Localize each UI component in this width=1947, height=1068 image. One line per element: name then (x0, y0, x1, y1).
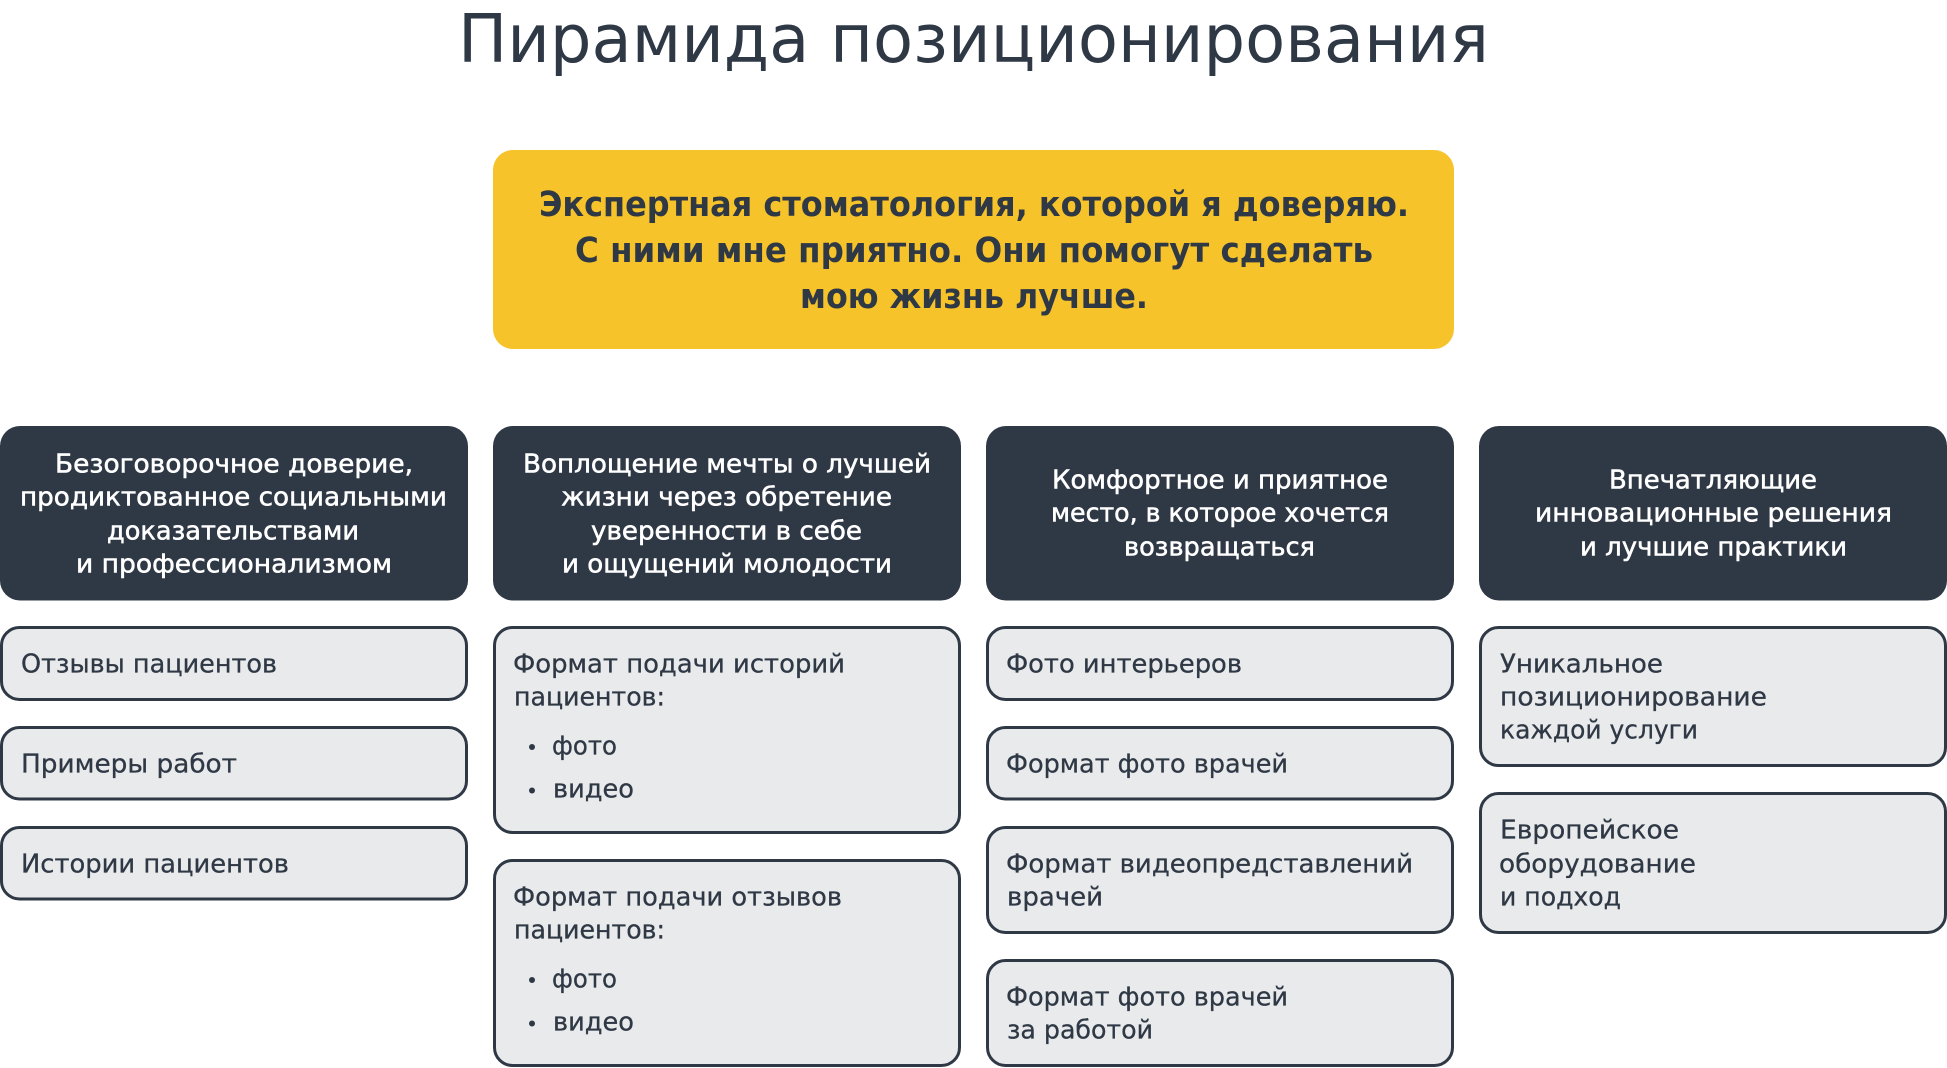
column 2 header: жизни через обретение (561, 482, 892, 512)
column 3 header: Комфортное и приятное (1052, 466, 1388, 496)
column 2 header (493, 426, 961, 600)
column 4 header: и лучшие практики (1580, 532, 1847, 562)
column 4 header: инновационные решения (1535, 498, 1892, 528)
title: Пирамида позиционирования (458, 0, 1489, 78)
card: Формат подачи отзывов пациентов: пациентов: (514, 916, 665, 946)
column 1 header: Безоговорочное доверие, (55, 450, 413, 480)
card: Формат подачи историй пациентов: пациентов: (514, 682, 665, 712)
panel: yellow key statement: С ними мне приятно. Они помогут сделать (575, 231, 1373, 271)
column 2 header: Воплощение мечты о лучшей (523, 450, 931, 480)
panel: yellow key statement: Экспертная стоматология, которой я доверяю. (539, 185, 1409, 225)
card: Формат видеопредставлений врачей (988, 828, 1452, 932)
card: Формат фото врачей: Формат фото врачей (1006, 750, 1288, 780)
column 4 header: Впечатляющие (1609, 466, 1817, 496)
card: Европейское оборудование и подход: и подход (1500, 882, 1621, 912)
card: Примеры работ: Примеры работ (21, 750, 237, 780)
column 1 header: продиктованное социальными (20, 482, 447, 512)
card: Отзывы пациентов: Отзывы пациентов (21, 650, 277, 680)
card: Формат подачи историй пациентов: видео (553, 774, 634, 804)
column 3 header (986, 426, 1454, 600)
panel: yellow key statement: мою жизнь лучше. (800, 277, 1148, 317)
card: Формат подачи отзывов пациентов (494, 860, 960, 1066)
card: Уникальное позиционирование каждой услуги: позиционирование (1500, 682, 1767, 712)
column 1 header (0, 426, 468, 600)
card: Европейское оборудование и подход: Европейское (1500, 816, 1679, 846)
card: Фото интерьеров (988, 628, 1452, 700)
card: Формат видеопредставлений врачей: Формат видеопредставлений (1006, 850, 1413, 880)
card: Формат подачи историй пациентов: фото (552, 732, 617, 762)
card: Формат подачи историй пациентов: Формат подачи историй (513, 650, 845, 680)
card: Формат подачи историй пациентов (494, 628, 960, 832)
card: Формат видеопредставлений врачей: врачей (1007, 882, 1103, 912)
column 3 header: возвращаться (1124, 532, 1315, 562)
card: Европейское оборудование и подход (1480, 794, 1946, 932)
card: Формат подачи отзывов пациентов: Формат подачи отзывов (513, 882, 842, 912)
column 2 header: и ощущений молодости (562, 550, 892, 580)
column 4 header (1479, 426, 1947, 600)
panel: yellow key statement (493, 150, 1454, 349)
card: Формат подачи отзывов пациентов: видео (553, 1008, 634, 1038)
column 2 header: уверенности в себе (591, 516, 862, 546)
card: Формат подачи отзывов пациентов: фото (552, 964, 617, 994)
card: Фото интерьеров: Фото интерьеров (1006, 650, 1242, 680)
card: Формат фото врачей за работой: за работой (1007, 1016, 1153, 1046)
card: Формат фото врачей за работой (988, 960, 1452, 1066)
card: Примеры работ (2, 728, 466, 799)
column 3 header: место, в которое хочется (1051, 498, 1389, 528)
card: Истории пациентов: Истории пациентов (21, 850, 289, 880)
column 1 header: и профессионализмом (76, 550, 392, 580)
card: Уникальное позиционирование каждой услуги (1480, 628, 1946, 766)
card: Истории пациентов (2, 828, 466, 899)
card: Отзывы пациентов (2, 628, 466, 700)
card: Формат фото врачей (988, 728, 1452, 799)
card: Формат фото врачей за работой: Формат фото врачей (1006, 982, 1288, 1012)
card: Уникальное позиционирование каждой услуги: каждой услуги (1500, 716, 1698, 746)
card: Уникальное позиционирование каждой услуги: Уникальное (1500, 650, 1663, 680)
column 1 header: доказательствами (107, 516, 359, 546)
card: Европейское оборудование и подход: оборудование (1499, 850, 1696, 880)
